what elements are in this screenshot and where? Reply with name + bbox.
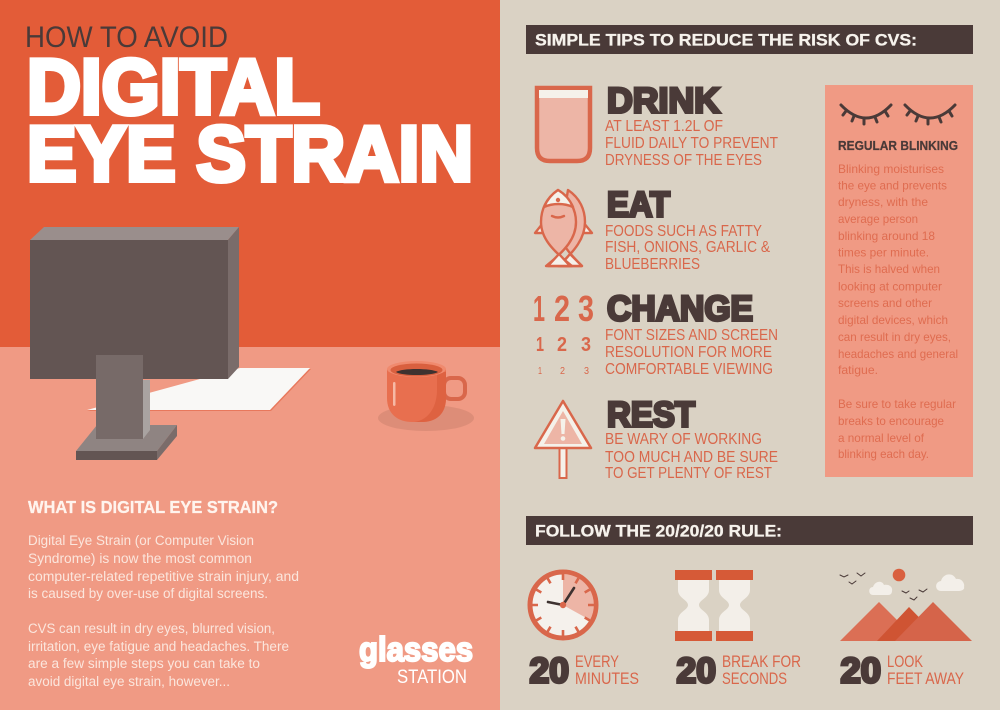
tip: change: CHANGE (607, 290, 753, 328)
illustration: coffee cup (378, 361, 474, 431)
header bar: simple tips (526, 25, 973, 54)
icon: font size numbers: 2 (560, 366, 565, 377)
text block: looking at computer (838, 280, 942, 294)
icon: font size numbers: 3 (581, 334, 591, 356)
title: HOW TO AVOID (25, 21, 228, 54)
text: every 20 minutes: MINUTES (575, 670, 639, 688)
tip: rest (605, 396, 778, 482)
header bar: 20/20/20 rule: FOLLOW THE 20/20/20 RULE: (535, 522, 782, 540)
text block: blinking around 18 (838, 229, 935, 243)
text block: screens and other (838, 296, 932, 310)
text block: headaches and general (838, 347, 958, 361)
illustration: monitor (30, 227, 239, 460)
text block: Blinking moisturises (838, 162, 944, 176)
text block: a normal level of (838, 431, 925, 445)
icon: font size numbers: 3 (584, 366, 589, 377)
paragraph 1: computer-related repetitive strain injury, and (28, 569, 299, 584)
icon: font size numbers: 1 (536, 334, 544, 356)
tip: drink: DRINK (607, 82, 720, 120)
text: look 20 feet away: LOOK (887, 653, 923, 671)
heading: WHAT IS DIGITAL EYE STRAIN? (28, 497, 278, 517)
text block: breaks to encourage (838, 414, 944, 428)
text block: average person (838, 212, 918, 226)
text: every 20 minutes (530, 652, 639, 690)
logo: glasses station: glasses (359, 631, 473, 669)
text block: fatigue. (838, 363, 878, 377)
header bar: simple tips: SIMPLE TIPS TO REDUCE THE RISK OF CVS: (535, 32, 917, 50)
text: look 20 feet away (840, 652, 964, 690)
paragraph 1 (28, 533, 299, 601)
tip: drink: DRYNESS OF THE EYES (605, 152, 762, 169)
icon: warning sign (535, 401, 591, 478)
text block: times per minute. (838, 246, 929, 260)
illustration: sheet of paper (87, 368, 311, 411)
tip: eat (605, 186, 771, 273)
tip: drink: FLUID DAILY TO PREVENT (605, 135, 778, 152)
text block: blinking each day. (838, 447, 929, 461)
title: EYE STRAIN (27, 110, 473, 198)
text: every 20 minutes: EVERY (575, 653, 619, 671)
text block: Be sure to take regular (838, 397, 956, 411)
icon: font size numbers: 1 (533, 288, 545, 329)
paragraph 1: is caused by over-use of digital screens. (28, 586, 268, 601)
logo: glasses station (359, 631, 473, 688)
icon: hourglasses (675, 570, 753, 641)
tip: rest: TO GET PLENTY OF REST (605, 465, 772, 482)
tip: rest: REST (607, 396, 695, 434)
text: break for 20 seconds: SECONDS (722, 670, 787, 688)
text block: dryness, with the (838, 195, 928, 209)
paragraph 2: avoid digital eye strain, however... (28, 674, 230, 689)
text block: digital devices, which (838, 313, 948, 327)
icon: font size numbers (533, 288, 594, 377)
tip: eat: BLUEBERRIES (605, 256, 700, 273)
title: DIGITAL (27, 42, 320, 130)
tip: drink: AT LEAST 1.2L OF (605, 118, 723, 135)
header bar: 20/20/20 rule (526, 516, 973, 545)
icon: mountains with sun, clouds and birds (840, 569, 972, 641)
tip: eat: EAT (607, 186, 670, 224)
icon: font size numbers: 2 (554, 288, 570, 329)
text block: the eye and prevents (838, 178, 947, 192)
text: break for 20 seconds (676, 652, 801, 690)
text: look 20 feet away: 20 (840, 652, 881, 690)
tip: eat: FISH, ONIONS, GARLIC & (605, 239, 771, 256)
panel: left orange wall and pink desk (0, 0, 500, 710)
text block: can result in dry eyes, (838, 330, 951, 344)
tip: drink (605, 82, 778, 169)
icon: font size numbers: 2 (557, 334, 567, 356)
tip: change: RESOLUTION FOR MORE (605, 344, 772, 361)
text block: This is halved when (838, 262, 940, 276)
icon: font size numbers: 1 (538, 366, 542, 377)
paragraph 2: are a few simple steps you can take to (28, 656, 260, 671)
logo: glasses station: STATION (397, 667, 467, 688)
tip: change: COMFORTABLE VIEWING (605, 361, 773, 378)
tip: rest: TOO MUCH AND BE SURE (605, 449, 778, 466)
text: break for 20 seconds: BREAK FOR (722, 653, 801, 671)
text: break for 20 seconds: 20 (676, 652, 716, 690)
section: what is digital eye strain (28, 497, 299, 689)
paragraph 2: irritation, eye fatigue and headaches. There (28, 639, 289, 654)
panel: regular blinking (825, 85, 973, 477)
paragraph 1: Syndrome) is now the most common (28, 551, 252, 566)
paragraph 1: Digital Eye Strain (or Computer Vision (28, 533, 254, 548)
text: every 20 minutes: 20 (530, 652, 569, 690)
tip: change: FONT SIZES AND SCREEN (605, 327, 778, 344)
heading: REGULAR BLINKING (838, 138, 958, 153)
icon: two fish (535, 190, 592, 266)
text block (838, 162, 958, 461)
icon: glass of water (537, 88, 590, 161)
text: look 20 feet away: FEET AWAY (887, 670, 964, 688)
icon: clock (530, 572, 596, 638)
paragraph 2: CVS can result in dry eyes, blurred vision, (28, 621, 275, 636)
title (25, 21, 473, 198)
tip: rest: BE WARY OF WORKING (605, 431, 762, 448)
paragraph 2 (28, 621, 289, 689)
icon: closed eyes (841, 105, 955, 124)
tip: eat: FOODS SUCH AS FATTY (605, 223, 762, 240)
tip: change (605, 290, 778, 378)
icon: font size numbers: 3 (578, 288, 594, 329)
